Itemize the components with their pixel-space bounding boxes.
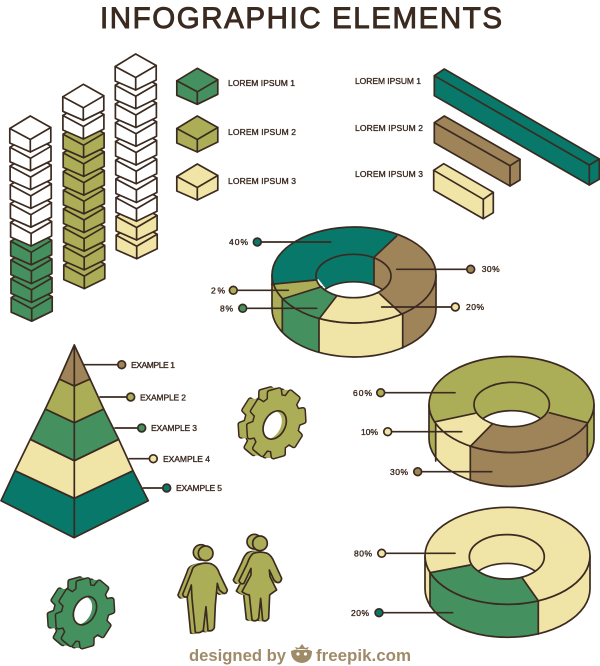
donut chart 1: 8% bbox=[220, 304, 233, 314]
pyramid chart: EXAMPLE 3 bbox=[151, 423, 197, 433]
donut chart 3 bbox=[351, 506, 591, 638]
legend item 1: LOREM IPSUM 1 bbox=[228, 78, 295, 88]
legend item 3: LOREM IPSUM 3 bbox=[228, 176, 296, 186]
3D bar: yellow: LOREM IPSUM 3 bbox=[355, 169, 423, 179]
pyramid chart: EXAMPLE 4 bbox=[163, 454, 210, 464]
stacked column: yellow bbox=[115, 54, 157, 259]
footer credit: freepik.com bbox=[316, 646, 411, 665]
donut chart 1: 2% bbox=[211, 286, 225, 296]
pyramid chart bbox=[1, 345, 222, 538]
legend item 2: LOREM IPSUM 2 bbox=[228, 127, 296, 137]
donut chart 2 bbox=[353, 356, 595, 488]
donut chart 1: 40% bbox=[229, 237, 248, 247]
donut chart 1: 20% bbox=[466, 302, 484, 312]
donut chart 2: 10% bbox=[361, 427, 378, 437]
3D bar: brown: LOREM IPSUM 2 bbox=[355, 123, 423, 133]
3D bar: teal bbox=[355, 69, 599, 185]
stacked column: olive bbox=[63, 84, 105, 289]
stacked column: green bbox=[10, 116, 52, 321]
donut chart 3: 20% bbox=[351, 608, 369, 618]
3D bar: brown bbox=[355, 116, 520, 186]
pyramid chart: EXAMPLE 5 bbox=[176, 483, 222, 493]
donut chart 2: 30% bbox=[390, 467, 408, 477]
pyramid chart: EXAMPLE 2 bbox=[140, 392, 186, 402]
footer credit bbox=[189, 644, 411, 665]
donut chart 1: 30% bbox=[482, 264, 500, 274]
legend item 1 bbox=[177, 68, 295, 104]
icon: green gear bbox=[48, 573, 114, 653]
icon: woman figure bbox=[233, 534, 282, 621]
donut chart 1 bbox=[211, 226, 500, 358]
legend item 2 bbox=[177, 116, 296, 152]
3D bar: teal: LOREM IPSUM 1 bbox=[355, 76, 421, 86]
donut chart 3: 80% bbox=[354, 548, 372, 558]
icon: olive gear bbox=[239, 383, 305, 463]
footer credit: designed by bbox=[189, 646, 287, 665]
donut chart 2: 60% bbox=[353, 388, 372, 398]
legend item 3 bbox=[177, 164, 296, 200]
icon: man figure bbox=[178, 545, 227, 633]
pyramid chart: EXAMPLE 1 bbox=[131, 360, 175, 370]
3D bar: yellow bbox=[355, 164, 493, 219]
title: INFOGRAPHIC ELEMENTS bbox=[100, 2, 502, 35]
